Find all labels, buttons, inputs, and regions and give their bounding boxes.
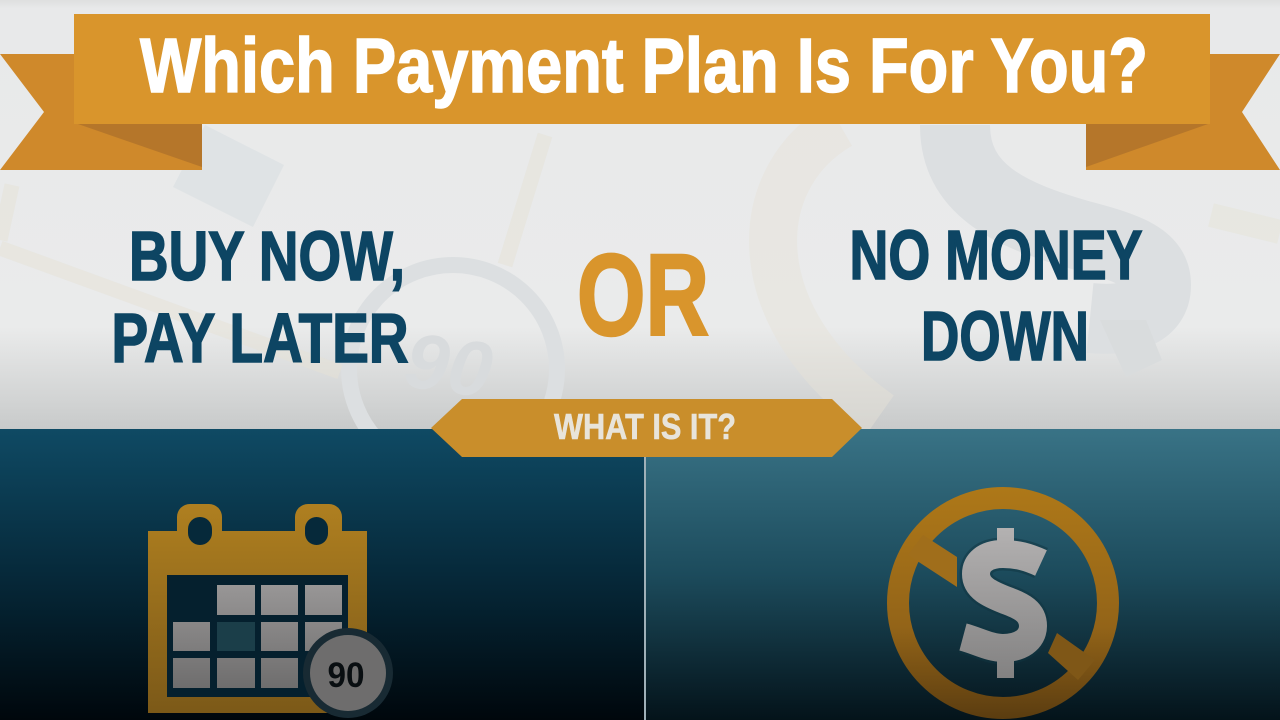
heading: no money down: NO MONEY xyxy=(850,216,1142,294)
ribbon banner xyxy=(0,14,1280,170)
right ribbon fold xyxy=(1086,124,1208,167)
what is it badge xyxy=(431,399,862,457)
divider line xyxy=(644,457,646,720)
background panel xyxy=(0,0,1280,430)
icon: 90 badge: 90 xyxy=(328,656,364,695)
left ribbon tail xyxy=(0,54,202,170)
heading: buy now, pay later xyxy=(112,217,408,377)
heading: or: OR xyxy=(577,230,709,360)
right ribbon tail xyxy=(1086,54,1280,170)
left ribbon fold xyxy=(78,124,202,167)
panel: left dark xyxy=(0,429,644,720)
panel: right teal xyxy=(646,429,1280,720)
heading: buy now, pay later: PAY LATER xyxy=(112,299,408,377)
faint background watermark: 90 xyxy=(400,315,498,415)
heading: no money down: DOWN xyxy=(921,297,1089,375)
faint background watermark xyxy=(0,125,1280,473)
banner body xyxy=(74,14,1210,124)
what is it badge: WHAT IS IT? xyxy=(554,406,736,447)
icon: no money xyxy=(898,498,1108,708)
heading: buy now, pay later: BUY NOW, xyxy=(129,217,405,295)
heading: no money down xyxy=(850,216,1142,375)
icon: 90 badge xyxy=(303,628,393,718)
icon: calendar xyxy=(148,504,393,718)
